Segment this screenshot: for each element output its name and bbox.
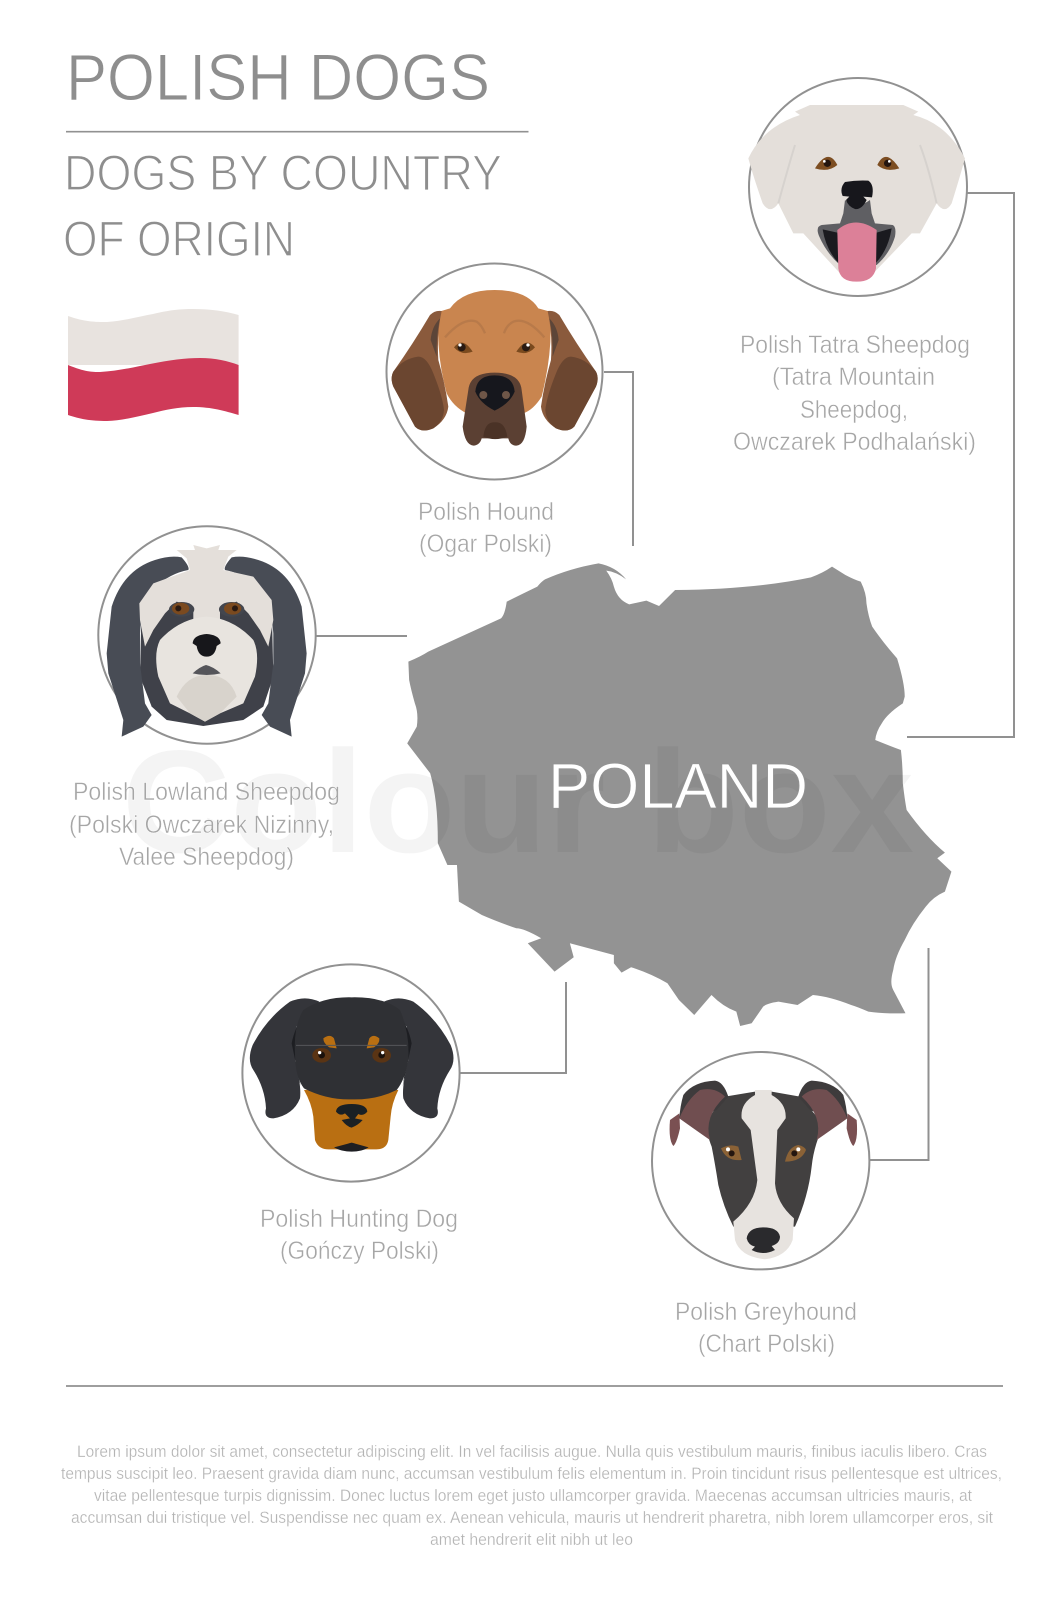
label: Polish Greyhound <box>675 1298 857 1358</box>
connector: hound <box>604 372 633 546</box>
connector: tatra <box>907 193 1014 737</box>
panel: Polish Lowland Sheepdog portrait <box>98 526 316 744</box>
label: Polish Hound: Polish Hound <box>418 498 554 526</box>
label: Polish Tatra Sheepdog: Polish Tatra Sheepdog <box>740 331 970 359</box>
label: Polish Greyhound: (Chart Polski) <box>698 1330 835 1358</box>
map label: POLAND: POLAND <box>548 750 808 822</box>
label: Polish Tatra Sheepdog: Owczarek Podhalański) <box>733 428 976 456</box>
subtitle <box>63 145 502 267</box>
subtitle: OF ORIGIN <box>63 211 295 267</box>
title: POLISH DOGS <box>66 40 490 114</box>
panel: Polish Hunting Dog portrait <box>242 964 460 1182</box>
label: Polish Lowland Sheepdog <box>69 778 340 871</box>
watermark: Colour box <box>122 720 914 883</box>
label: Polish Tatra Sheepdog: Sheepdog, <box>800 396 908 424</box>
text block: lorem ipsum footer: vitae pellentesque turpis dignissim. Donec luctus lorem eget justo ullamcorper gravida. Maecenas accumsan ultricies mauris, at <box>94 1487 972 1505</box>
label: Polish Tatra Sheepdog: (Tatra Mountain <box>772 363 935 391</box>
connector: greyhound <box>870 948 928 1160</box>
text block: lorem ipsum footer <box>61 1443 1002 1549</box>
map of Poland <box>407 563 951 1026</box>
label: Polish Lowland Sheepdog: Polish Lowland Sheepdog <box>73 778 340 806</box>
label: Polish Lowland Sheepdog: Valee Sheepdog) <box>119 843 294 871</box>
text block: lorem ipsum footer: accumsan dui tristique vel. Suspendisse nec quam ex. Aenean vehicula, mauris ut hendrerit pharetra, nibh lorem ullamcorper eros, sit <box>71 1509 993 1527</box>
subtitle: DOGS BY COUNTRY <box>64 145 502 201</box>
text block: lorem ipsum footer: Lorem ipsum dolor sit amet, consectetur adipiscing elit. In vel facilisis augue. Nulla quis vestibulum mauris, finibus iaculis libero. Cras <box>77 1443 987 1461</box>
label: Polish Hunting Dog: (Gończy Polski) <box>280 1237 439 1265</box>
label: Polish Lowland Sheepdog: (Polski Owczarek Nizinny, <box>69 811 334 839</box>
label: Polish Hunting Dog: Polish Hunting Dog <box>260 1205 458 1233</box>
label: Polish Greyhound: Polish Greyhound <box>675 1298 857 1326</box>
connector: hunting <box>460 982 566 1073</box>
icon: Polish flag <box>68 309 239 421</box>
label: Polish Hunting Dog <box>260 1205 458 1265</box>
label: Polish Hound: (Ogar Polski) <box>419 530 552 558</box>
label: Polish Hound <box>418 498 554 558</box>
text block: lorem ipsum footer: amet hendrerit elit nibh ut leo <box>430 1531 633 1549</box>
panel: Polish Greyhound portrait <box>652 1052 869 1269</box>
label: Polish Tatra Sheepdog <box>733 331 976 456</box>
panel: Polish Hound portrait <box>386 264 602 480</box>
connector: lowland <box>315 635 407 637</box>
text block: lorem ipsum footer: tempus suscipit leo. Praesent gravida diam nunc, accumsan vestibulum felis elementum in. Proin tincidunt risus pellentesque est ultrices, <box>61 1465 1002 1483</box>
panel: Polish Tatra Sheepdog portrait <box>748 78 967 296</box>
